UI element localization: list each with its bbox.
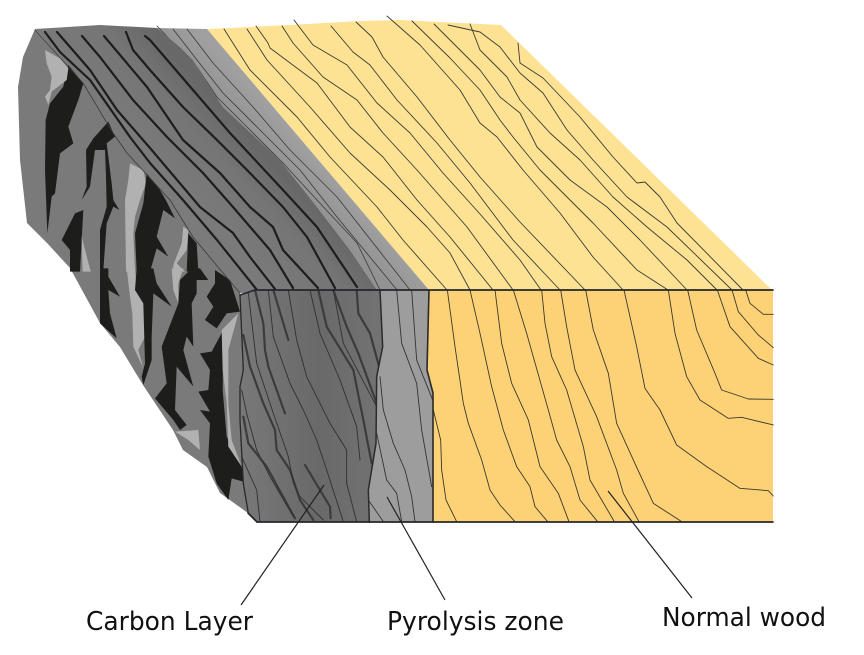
top face: carbon layer	[35, 25, 382, 293]
label: normal wood: Normal wood	[662, 603, 826, 633]
pyrolysis front lines	[368, 290, 433, 522]
label: pyrolysis zone: Pyrolysis zone	[387, 607, 564, 637]
front face: pyrolysis zone	[368, 290, 433, 522]
top face: pyrolysis band	[157, 26, 429, 290]
carbon front lines	[240, 290, 380, 522]
normal wood grain lines	[433, 290, 773, 522]
rock cracks upper	[45, 50, 198, 272]
top face wood grain lines	[224, 16, 743, 290]
leader: carbon layer	[241, 485, 324, 605]
leader: pyrolysis zone	[387, 497, 445, 600]
front face: normal wood	[427, 290, 773, 522]
front face: carbon layer	[240, 290, 383, 522]
block edges	[240, 290, 773, 522]
leader: normal wood	[608, 491, 692, 598]
pyrolysis band grain lines	[157, 26, 410, 290]
carbon layer char lines	[45, 32, 357, 290]
boundary line	[427, 290, 433, 522]
top face: normal wood	[207, 16, 772, 290]
rock cracks lower	[100, 268, 243, 500]
rock thin edge line	[35, 30, 240, 293]
left rock face	[18, 29, 257, 522]
label: carbon layer: Carbon Layer	[86, 607, 253, 637]
